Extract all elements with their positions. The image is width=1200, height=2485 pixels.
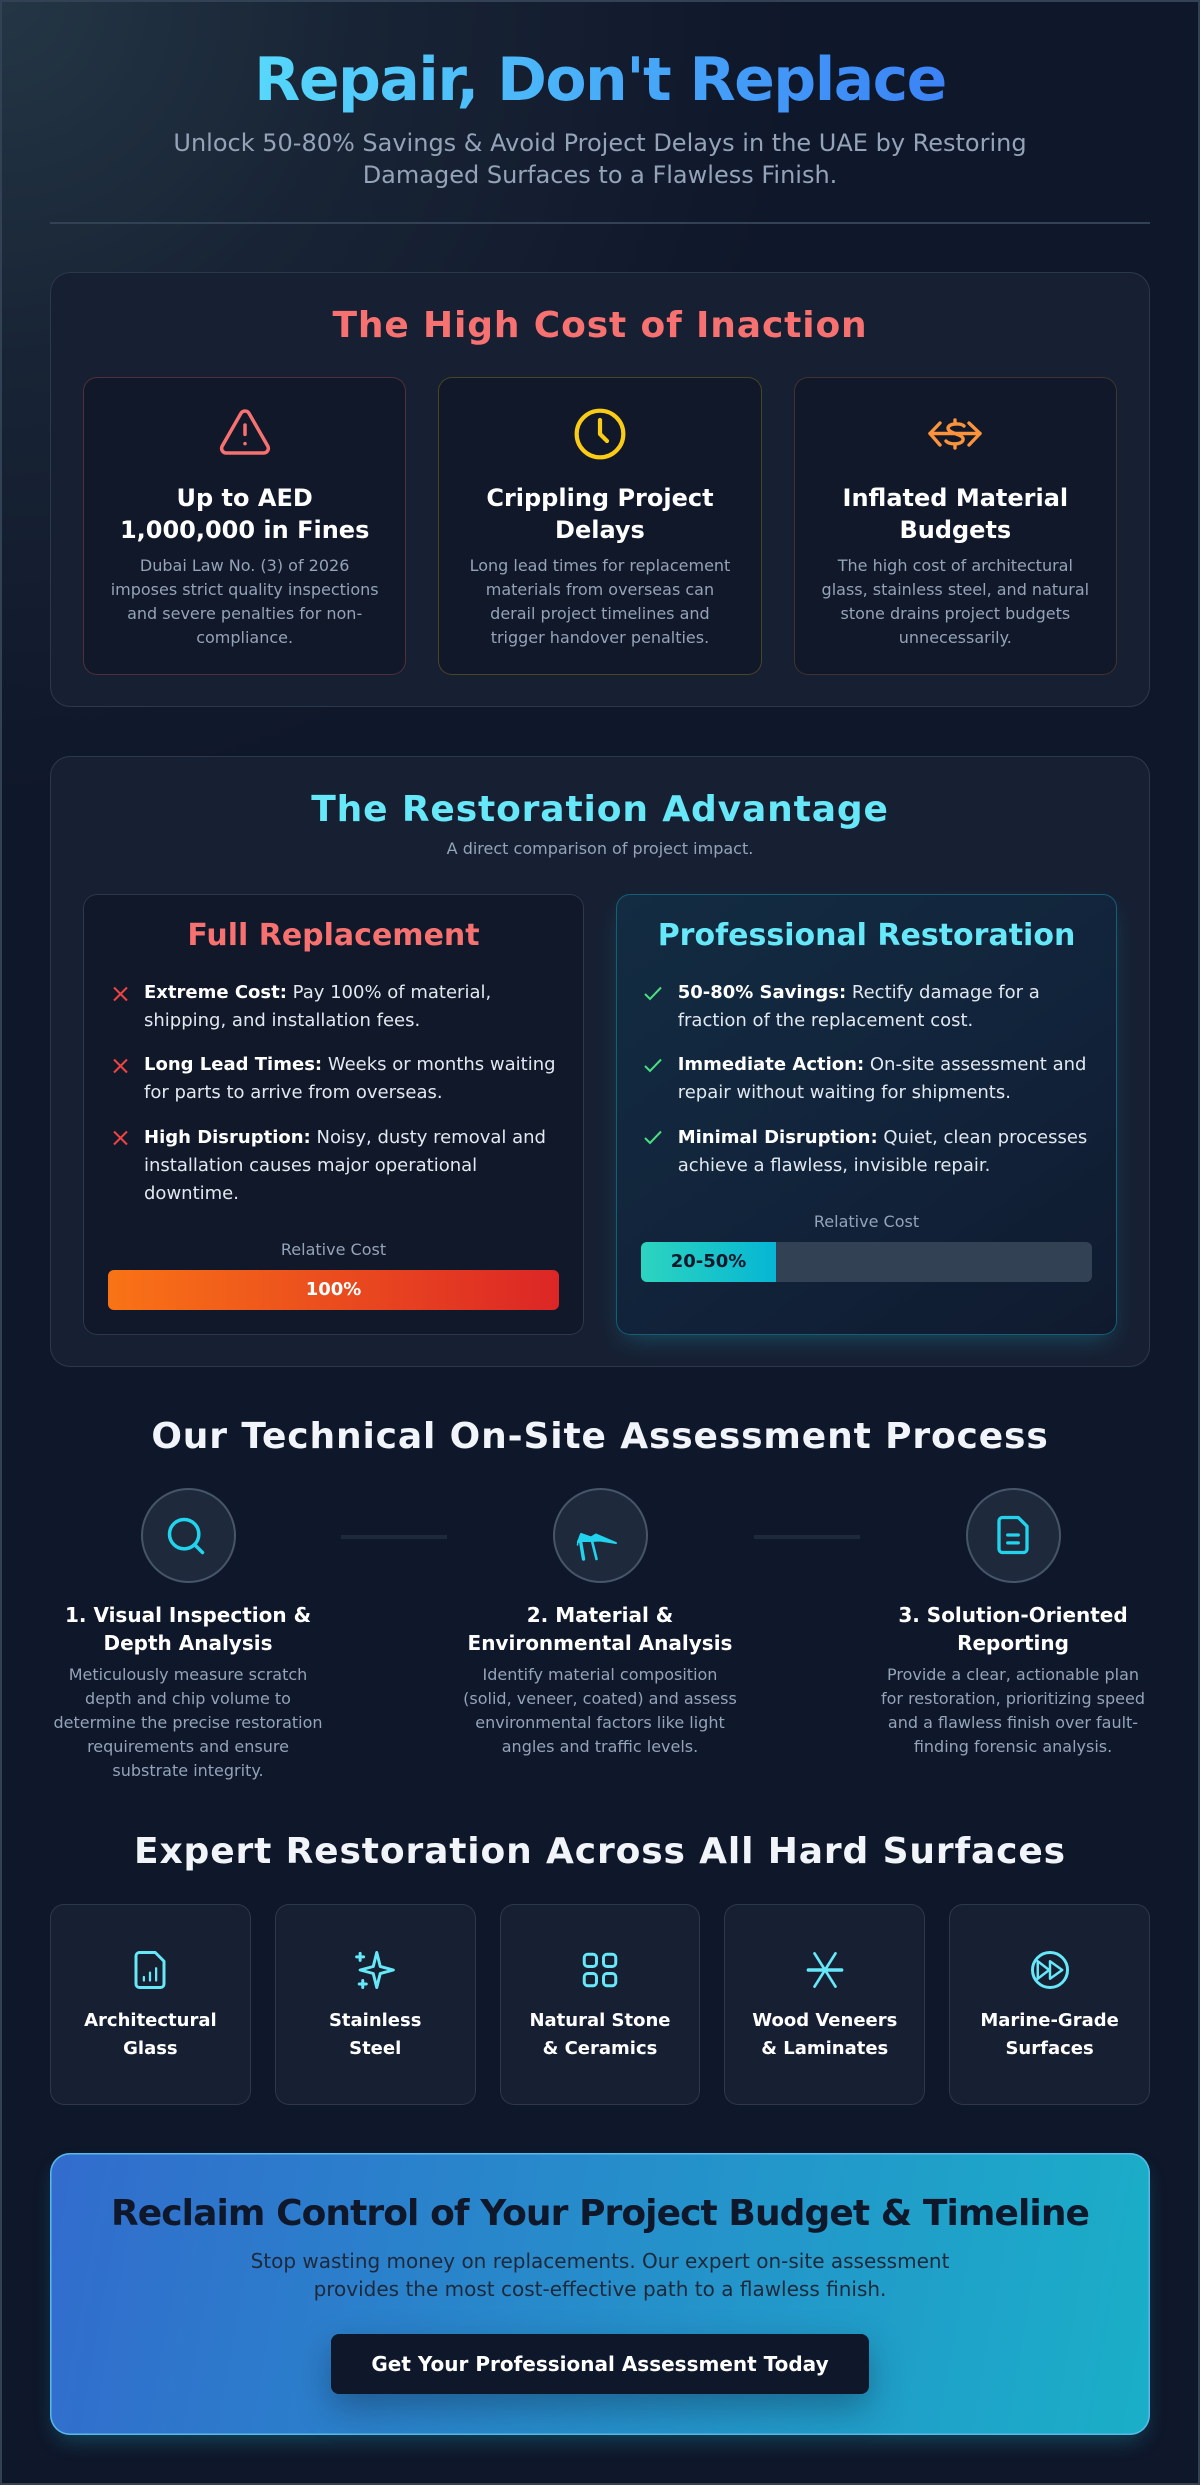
step 3 xyxy=(881,1488,1145,1756)
list item: for parts to arrive from overseas. xyxy=(144,1082,443,1103)
heading: full replacement: Full Replacement xyxy=(187,918,480,953)
tile label: Surfaces xyxy=(1005,2038,1094,2058)
heading: high cost of inaction: The High Cost of Inaction xyxy=(332,304,868,346)
step title: Depth Analysis xyxy=(103,1630,272,1654)
tile label xyxy=(84,2010,217,2058)
card title xyxy=(843,484,1068,544)
tile label: Stainless xyxy=(329,2010,421,2030)
heading: professional restoration: Professional Restoration xyxy=(658,918,1075,953)
step text: angles and traffic levels. xyxy=(502,1737,698,1756)
step text: substrate integrity. xyxy=(112,1761,264,1780)
cta text: provides the most cost-effective path to a flawless finish. xyxy=(314,2277,886,2301)
card title: 1,000,000 in Fines xyxy=(120,516,369,544)
icon: cross xyxy=(113,1058,128,1074)
bar: replacement cost 100% xyxy=(108,1270,559,1310)
subheading: A direct comparison of project impact. xyxy=(447,839,753,858)
tile: marine-grade surfaces xyxy=(949,1904,1150,2105)
card text: glass, stainless steel, and natural xyxy=(822,580,1089,598)
card: delays xyxy=(438,377,762,675)
tile label: Wood Veneers xyxy=(752,2010,897,2030)
list item: downtime. xyxy=(144,1183,239,1204)
list item xyxy=(144,1054,556,1103)
step title: Reporting xyxy=(957,1630,1069,1654)
tile label: Architectural xyxy=(84,2010,217,2030)
list item: Long Lead Times: Weeks or months waiting xyxy=(144,1054,556,1075)
tile: natural stone and ceramics xyxy=(500,1904,700,2105)
card: professional restoration xyxy=(616,894,1117,1335)
card text: derail project timelines and xyxy=(490,604,710,622)
step text: determine the precise restoration xyxy=(53,1713,323,1732)
step text: requirements and ensure xyxy=(87,1737,289,1756)
step text: and a flawless finish over fault- xyxy=(888,1713,1138,1732)
step title: 1. Visual Inspection & xyxy=(65,1602,311,1626)
connector xyxy=(341,1535,447,1539)
icon: cross xyxy=(113,986,128,1002)
card: fines xyxy=(83,377,406,675)
icon: cross xyxy=(113,1130,128,1146)
list item: Extreme Cost: Pay 100% of material, xyxy=(144,982,491,1003)
tile label: & Ceramics xyxy=(543,2038,657,2058)
tile: wood veneers and laminates xyxy=(724,1904,925,2105)
step text xyxy=(881,1665,1145,1756)
step title: Environmental Analysis xyxy=(468,1630,732,1654)
tile label: & Laminates xyxy=(761,2038,888,2058)
heading: restoration advantage: The Restoration Advantage xyxy=(311,789,889,830)
icon: check xyxy=(644,1130,662,1144)
list item: fraction of the replacement cost. xyxy=(678,1010,973,1031)
list item: High Disruption: Noisy, dusty removal and xyxy=(144,1127,546,1148)
step text: Identify material composition xyxy=(483,1665,717,1684)
icon: clock xyxy=(574,408,626,460)
icon: warning triangle xyxy=(220,409,270,455)
card text xyxy=(822,556,1089,646)
step title: 3. Solution-Oriented xyxy=(898,1602,1128,1626)
tile: stainless steel xyxy=(275,1904,476,2105)
card text xyxy=(111,556,379,646)
step text: environmental factors like light xyxy=(475,1713,725,1732)
tile label xyxy=(724,2006,925,2062)
cta button xyxy=(331,2334,869,2394)
card title: Inflated Material xyxy=(843,484,1068,512)
step text: (solid, veneer, coated) and assess xyxy=(463,1689,737,1708)
icon: material tool xyxy=(553,1488,648,1583)
list item: installation causes major operational xyxy=(144,1155,477,1176)
card title xyxy=(486,484,714,544)
step text: finding forensic analysis. xyxy=(914,1737,1112,1756)
list item xyxy=(144,1127,546,1204)
step title xyxy=(65,1602,311,1654)
tile label: Steel xyxy=(349,2038,401,2058)
bar fill: 20-50% xyxy=(671,1251,746,1272)
subtitle xyxy=(173,129,1027,189)
bar: replacement cost 100%: 100% xyxy=(306,1279,361,1300)
icon: sparkles xyxy=(355,1951,395,1989)
step text xyxy=(463,1665,737,1756)
list: restoration benefits xyxy=(644,982,1087,1176)
bar fill xyxy=(641,1242,776,1282)
list item: Immediate Action: On-site assessment and xyxy=(678,1054,1086,1075)
title: Repair, Don't Replace xyxy=(254,45,946,115)
subtitle: Unlock 50-80% Savings & Avoid Project Delays in the UAE by Restoring xyxy=(173,129,1027,157)
card title: Budgets xyxy=(899,516,1011,544)
icon: check xyxy=(644,986,662,1000)
list item: shipping, and installation fees. xyxy=(144,1010,420,1031)
list item xyxy=(678,1127,1087,1176)
list item: Minimal Disruption: Quiet, clean processes xyxy=(678,1127,1087,1148)
list: replacement drawbacks xyxy=(113,982,556,1204)
icon: file with bars xyxy=(134,1951,166,1989)
icon: magnifier xyxy=(141,1488,236,1583)
card text xyxy=(470,556,730,646)
card text: stone drains project budgets xyxy=(840,604,1070,622)
card title: Delays xyxy=(555,516,645,544)
card text: Long lead times for replacement xyxy=(470,556,730,574)
list item xyxy=(144,982,491,1031)
card text: materials from overseas can xyxy=(486,580,714,598)
cta text: Stop wasting money on replacements. Our expert on-site assessment xyxy=(251,2249,949,2273)
card text: Dubai Law No. (3) of 2026 xyxy=(140,556,349,574)
heading: hard surfaces: Expert Restoration Across All Hard Surfaces xyxy=(134,1831,1066,1872)
card: full replacement xyxy=(83,894,584,1335)
step title xyxy=(898,1602,1128,1654)
step text: depth and chip volume to xyxy=(85,1689,291,1708)
card text: The high cost of architectural xyxy=(838,556,1073,574)
cta button: Get Your Professional Assessment Today xyxy=(371,2352,829,2376)
step title: 2. Material & xyxy=(527,1602,673,1626)
list item: achieve a flawless, invisible repair. xyxy=(678,1155,990,1176)
step 1 xyxy=(53,1488,323,1780)
label: relative cost: Relative Cost xyxy=(281,1240,386,1259)
icon: four squares xyxy=(582,1952,618,1988)
step text: Provide a clear, actionable plan xyxy=(887,1665,1139,1684)
card title: Up to AED xyxy=(177,484,313,512)
heading: assessment process: Our Technical On-Site Assessment Process xyxy=(151,1416,1049,1456)
tile label xyxy=(329,2010,421,2058)
label: relative cost: Relative Cost xyxy=(814,1212,919,1231)
icon: circle with double arrow xyxy=(1029,1949,1071,1991)
card title: Crippling Project xyxy=(486,484,714,512)
card: budgets xyxy=(794,377,1117,675)
tile: architectural glass xyxy=(50,1904,251,2105)
card text: and severe penalties for non- xyxy=(127,604,362,622)
list item: 50-80% Savings: Rectify damage for a xyxy=(678,982,1040,1003)
step text xyxy=(53,1665,323,1780)
cta text xyxy=(50,2247,1150,2303)
connector xyxy=(754,1535,860,1539)
list item: repair without waiting for shipments. xyxy=(678,1082,1011,1103)
step text: for restoration, prioritizing speed xyxy=(881,1689,1145,1708)
step 2 xyxy=(463,1488,737,1756)
card text: imposes strict quality inspections xyxy=(111,580,379,598)
card text: trigger handover penalties. xyxy=(491,628,709,646)
cta heading: Reclaim Control of Your Project Budget & Timeline xyxy=(111,2193,1089,2234)
icon: check xyxy=(644,1058,662,1072)
panel: the restoration advantage xyxy=(50,756,1150,1367)
tile label: Natural Stone xyxy=(529,2010,671,2030)
panel: the high cost of inaction xyxy=(50,272,1150,707)
step text: Meticulously measure scratch xyxy=(69,1665,307,1684)
list item xyxy=(678,1054,1086,1103)
card title xyxy=(120,484,369,544)
step title xyxy=(468,1602,732,1654)
subtitle: Damaged Surfaces to a Flawless Finish. xyxy=(363,161,837,189)
tile label xyxy=(949,2006,1150,2062)
bar: restoration cost 20-50% xyxy=(641,1242,1092,1282)
card text: unnecessarily. xyxy=(899,628,1012,646)
tile label: Marine-Grade xyxy=(980,2010,1119,2030)
panel: call to action xyxy=(50,2153,1150,2435)
icon: report document xyxy=(966,1488,1061,1583)
icon: asterisk xyxy=(804,1949,846,1991)
tile label: Glass xyxy=(123,2038,178,2058)
tile label xyxy=(529,2010,671,2058)
icon: dollar arrows xyxy=(928,418,982,450)
list item xyxy=(678,982,1040,1031)
card text: compliance. xyxy=(196,628,293,646)
